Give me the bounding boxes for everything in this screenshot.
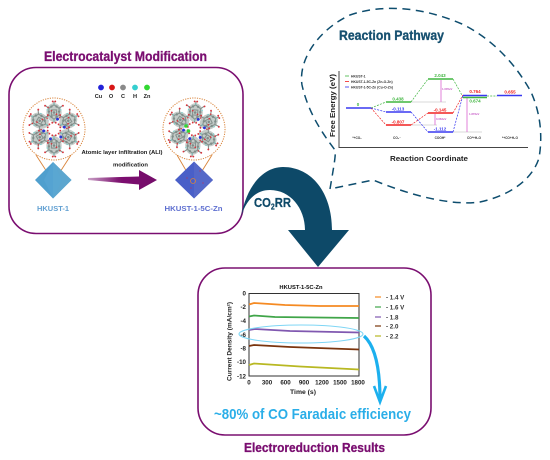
x axis ticks: 900 <box>299 380 310 386</box>
icon: MOF structure HKUST-1-5C-Zn <box>162 98 226 160</box>
atom legend: Cu <box>95 94 103 100</box>
x axis ticks <box>247 380 365 386</box>
text: atomic layer infiltration: Atomic layer infiltration (ALI) <box>82 150 163 156</box>
gap values: 1.876eV <box>469 112 480 116</box>
heading: Electrocatalyst Modification: Electrocatalyst Modification <box>44 49 207 64</box>
atom legend <box>95 85 151 100</box>
axes <box>339 71 528 148</box>
label: HKUST-1: HKUST-1 <box>37 204 69 213</box>
chart: current density vs time <box>226 285 405 396</box>
energy levels <box>346 79 522 132</box>
reaction coordinate labels: *+CO₂ <box>352 136 362 140</box>
reaction coordinate labels <box>352 136 518 140</box>
x axis ticks: 600 <box>280 380 291 386</box>
panel: electrocatalyst modification <box>9 68 243 234</box>
y axis ticks: -8 <box>240 346 247 352</box>
y axis ticks: -6 <box>240 332 247 339</box>
reaction coordinate labels: COOH* <box>435 136 446 140</box>
heading: Electroreduction Results: Electroreduction Results <box>244 440 385 455</box>
data lines <box>249 303 359 370</box>
gap values <box>436 87 480 121</box>
y axis ticks <box>237 290 247 380</box>
legend: HKUST-1-5C-Zn (Zn-O-Zn) <box>351 80 393 84</box>
y axis title: Current Density (mA/cm²) <box>226 302 234 381</box>
arrow: highlight to efficiency <box>364 336 386 402</box>
level values: 0.764 <box>469 89 481 94</box>
heading: Reaction Pathway: Reaction Pathway <box>339 28 444 43</box>
legend: - 2.2 <box>386 334 399 340</box>
arrow: modification <box>88 170 157 190</box>
text: CO Faradaic efficiency: ~80% of CO Faradaic efficiency <box>214 406 412 423</box>
icon: octahedral crystal HKUST-1 <box>35 162 72 198</box>
atom legend: C <box>121 94 125 100</box>
magenta gap arrows <box>435 80 467 132</box>
level values: 0 <box>357 102 360 107</box>
zoom lines: HKUST-1 <box>36 155 71 172</box>
zoom lines: HKUST-1-5C-Zn <box>177 155 212 179</box>
atom legend: Zn <box>144 94 151 100</box>
label: CO2RR: 2 <box>271 202 275 212</box>
reaction coordinate labels: CO₂⁻ <box>393 136 401 140</box>
gap values: 0.662eV <box>436 117 447 121</box>
reaction coordinate labels: CO*+H₂O <box>467 136 482 140</box>
chart title: HKUST-1-5C-Zn <box>279 285 323 291</box>
y axis ticks: -2 <box>240 304 247 311</box>
arrow: CO2RR curved arrow <box>241 167 349 267</box>
y axis ticks: -12 <box>237 374 247 380</box>
level values: 0.655 <box>504 90 516 94</box>
y axis ticks: 0 <box>243 290 247 298</box>
x axis ticks: 1800 <box>351 380 365 386</box>
legend: - 1.8 <box>386 314 399 322</box>
text: atomic layer infiltration <box>82 150 163 168</box>
highlight ellipse <box>239 325 363 343</box>
icon: octahedral crystal HKUST-1-5C-Zn <box>175 162 213 198</box>
x axis ticks: 1200 <box>315 380 329 386</box>
legend: HKUST-1 <box>351 74 366 78</box>
x axis title: Time (s) <box>290 389 316 396</box>
level values <box>357 73 516 132</box>
y axis ticks: -10 <box>237 359 247 366</box>
level values: 0.438 <box>392 96 404 102</box>
label: CO2RR: RR <box>275 195 292 210</box>
panel: electroreduction results <box>198 268 431 435</box>
legend <box>345 74 393 90</box>
legend: - 1.6 V <box>386 304 405 312</box>
legend: - 1.4 V <box>386 294 405 302</box>
x axis ticks: 0 <box>247 380 251 386</box>
connectors <box>371 79 497 132</box>
icon: MOF structure HKUST-1 <box>23 98 85 160</box>
x axis title: Reaction Coordinate <box>390 156 468 163</box>
gray reference lines <box>411 102 482 132</box>
x axis ticks: 1500 <box>333 380 347 386</box>
level values: -0.807 <box>392 120 405 124</box>
text: atomic layer infiltration: modification <box>113 162 148 168</box>
atom legend: O <box>109 94 114 100</box>
legend: HKUST-1-5C-Zn (Cu-O-Zn) <box>351 86 393 90</box>
callout: reaction pathway bubble <box>301 8 541 203</box>
y axis ticks: -4 <box>240 318 247 325</box>
plot frame <box>249 294 359 376</box>
level values: -0.145 <box>434 108 447 112</box>
chart: free energy diagram <box>330 71 528 163</box>
label: CO2RR: CO <box>254 195 274 210</box>
y axis title: Free Energy (eV) <box>330 74 337 137</box>
reaction coordinate labels: *+CO+H₂O <box>502 136 518 140</box>
legend <box>375 294 405 340</box>
level values: 2.043 <box>434 73 446 78</box>
label: HKUST-1-5C-Zn: HKUST-1-5C-Zn <box>164 204 223 213</box>
level values: -0.113 <box>392 106 405 112</box>
level values: -1.112 <box>434 126 447 132</box>
atom legend: H <box>133 94 137 100</box>
x axis ticks: 300 <box>262 380 273 386</box>
level values: 0.674 <box>469 98 481 104</box>
gap values: 1.605eV <box>442 87 453 91</box>
legend: - 2.0 <box>386 324 399 330</box>
